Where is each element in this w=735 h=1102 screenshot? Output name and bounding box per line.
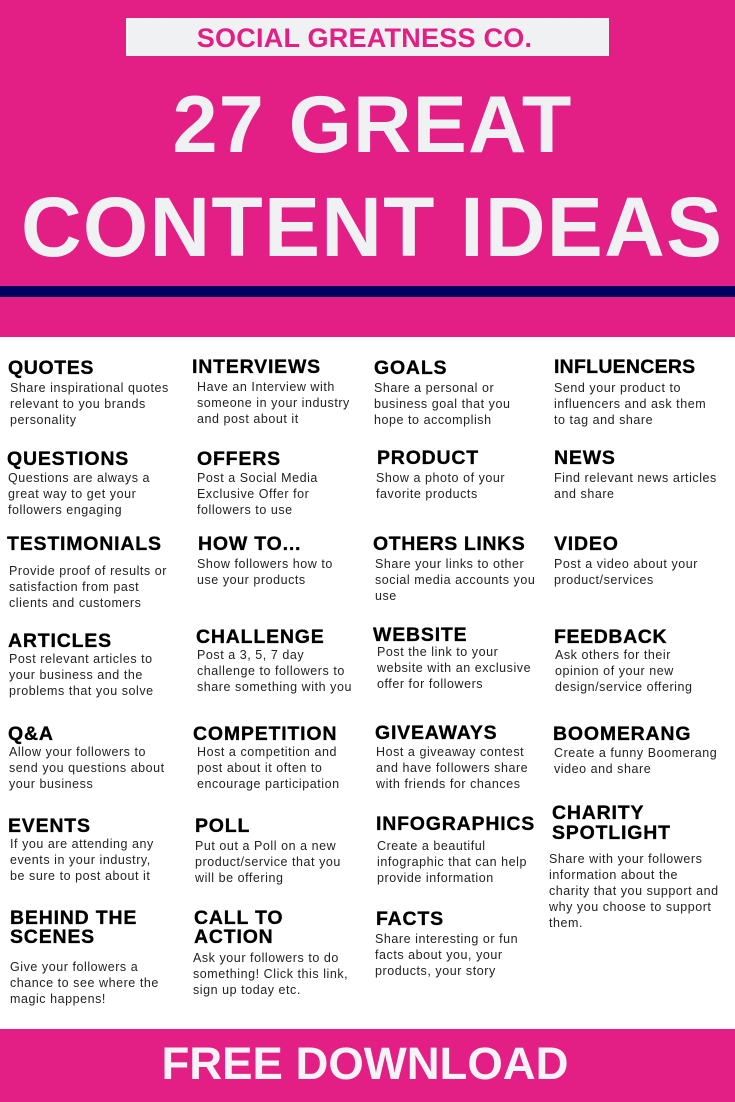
idea: how to: Show followers how to bbox=[197, 557, 333, 571]
idea: goals: GOALS bbox=[374, 357, 447, 379]
idea: poll: will be offering bbox=[195, 871, 283, 885]
idea: facts: FACTS bbox=[376, 908, 444, 930]
idea: challenge: Post a 3, 5, 7 day bbox=[197, 648, 304, 662]
idea: interviews: Have an Interview with bbox=[197, 380, 335, 394]
idea: influencers: influencers and ask them bbox=[554, 397, 706, 411]
idea: competition: post about it often to bbox=[197, 761, 322, 775]
idea: goals: business goal that you bbox=[374, 397, 510, 411]
idea: quotes: Share inspirational quotes bbox=[10, 381, 169, 395]
idea: giveaways: with friends for chances bbox=[376, 777, 521, 791]
idea: offers: OFFERS bbox=[197, 448, 281, 470]
idea: call to action: CALL TO bbox=[194, 907, 283, 929]
idea: questions: followers engaging bbox=[8, 503, 122, 517]
idea: how to bbox=[197, 533, 333, 587]
footer banner: FREE DOWNLOAD bbox=[162, 1038, 568, 1089]
idea: feedback: design/service offering bbox=[555, 680, 692, 694]
idea: behind the scenes: BEHIND THE bbox=[10, 907, 137, 929]
idea: website: Post the link to your bbox=[377, 645, 498, 659]
idea: infographics: provide information bbox=[377, 871, 494, 885]
idea: facts: Share interesting or fun bbox=[375, 932, 518, 946]
idea: quotes: personality bbox=[10, 413, 76, 427]
idea: call to action: sign up today etc. bbox=[193, 983, 301, 997]
idea: charity spotlight: information about the bbox=[549, 868, 678, 882]
idea: feedback: Ask others for their bbox=[555, 648, 671, 662]
idea: quotes bbox=[8, 357, 169, 427]
idea: challenge bbox=[196, 626, 352, 694]
idea: articles: Post relevant articles to bbox=[9, 652, 153, 666]
idea: quotes: relevant to you brands bbox=[10, 397, 146, 411]
idea: offers: Exclusive Offer for bbox=[197, 487, 309, 501]
idea: call to action bbox=[193, 907, 348, 997]
idea: competition: COMPETITION bbox=[193, 723, 337, 745]
idea: articles: your business and the bbox=[9, 668, 143, 682]
header panel bbox=[0, 0, 735, 337]
idea: charity spotlight: charity that you support and bbox=[549, 884, 719, 898]
idea: news: Find relevant news articles bbox=[554, 471, 717, 485]
idea: influencers: INFLUENCERS bbox=[554, 356, 695, 378]
idea: others links: OTHERS LINKS bbox=[373, 533, 525, 555]
idea: video bbox=[554, 533, 698, 587]
idea: interviews: and post about it bbox=[197, 412, 299, 426]
idea: behind the scenes bbox=[10, 907, 159, 1006]
idea: challenge: challenge to followers to bbox=[197, 664, 345, 678]
idea: challenge: share something with you bbox=[197, 680, 352, 694]
idea: infographics: infographic that can help bbox=[377, 855, 527, 869]
idea: interviews: INTERVIEWS bbox=[192, 356, 321, 378]
brand banner bbox=[126, 18, 609, 56]
idea: articles: ARTICLES bbox=[8, 630, 112, 652]
idea: website bbox=[372, 624, 531, 691]
idea: testimonials: TESTIMONIALS bbox=[7, 533, 162, 555]
idea: quotes: QUOTES bbox=[8, 357, 94, 379]
idea: how to: use your products bbox=[197, 573, 306, 587]
idea: others links: use bbox=[375, 589, 397, 603]
idea: infographics: INFOGRAPHICS bbox=[376, 813, 535, 835]
idea: facts: facts about you, your bbox=[375, 948, 503, 962]
idea: website: WEBSITE bbox=[373, 624, 467, 646]
idea: influencers: to tag and share bbox=[554, 413, 653, 427]
idea: q&a bbox=[8, 723, 165, 791]
idea: news bbox=[554, 447, 717, 501]
idea: q&a: Q&A bbox=[8, 723, 54, 745]
idea: testimonials bbox=[7, 533, 167, 610]
idea: charity spotlight bbox=[549, 802, 719, 930]
idea: testimonials: Provide proof of results or bbox=[9, 564, 167, 578]
idea: poll bbox=[195, 815, 341, 885]
idea: behind the scenes: magic happens! bbox=[10, 992, 106, 1006]
idea: website: website with an exclusive bbox=[377, 661, 531, 675]
idea: product: favorite products bbox=[376, 487, 478, 501]
idea: articles: problems that you solve bbox=[9, 684, 154, 698]
idea: giveaways: GIVEAWAYS bbox=[375, 722, 497, 744]
idea: video: VIDEO bbox=[554, 533, 619, 555]
idea: charity spotlight: them. bbox=[549, 916, 583, 930]
idea: call to action: something! Click this link, bbox=[193, 967, 348, 981]
idea: boomerang bbox=[553, 723, 717, 776]
idea: poll: product/service that you bbox=[195, 855, 341, 869]
idea: offers bbox=[197, 448, 318, 517]
idea: questions: Questions are always a bbox=[8, 471, 150, 485]
idea: events: be sure to post about it bbox=[10, 869, 150, 883]
idea: call to action: Ask your followers to do bbox=[193, 951, 339, 965]
title line 2: CONTENT IDEAS bbox=[21, 180, 723, 274]
idea: q&a: Allow your followers to bbox=[9, 745, 146, 759]
idea: others links: Share your links to other bbox=[375, 557, 524, 571]
idea: others links bbox=[373, 533, 535, 603]
idea: poll: POLL bbox=[195, 815, 250, 837]
idea: goals: Share a personal or bbox=[374, 381, 494, 395]
idea: questions: QUESTIONS bbox=[7, 448, 129, 470]
idea: goals: hope to accomplish bbox=[374, 413, 492, 427]
idea: boomerang: video and share bbox=[554, 762, 651, 776]
idea: news: and share bbox=[554, 487, 615, 501]
idea: boomerang: Create a funny Boomerang bbox=[554, 746, 717, 760]
idea: giveaways: Host a giveaway contest bbox=[376, 745, 524, 759]
idea: competition: Host a competition and bbox=[197, 745, 337, 759]
idea: charity spotlight: SPOTLIGHT bbox=[552, 822, 671, 844]
idea: product: PRODUCT bbox=[377, 447, 479, 469]
idea: infographics: Create a beautiful bbox=[377, 839, 486, 853]
idea: product: Show a photo of your bbox=[376, 471, 505, 485]
idea: competition: encourage participation bbox=[197, 777, 340, 791]
idea: events: If you are attending any bbox=[10, 837, 154, 851]
idea: facts bbox=[375, 908, 518, 978]
idea: poll: Put out a Poll on a new bbox=[195, 839, 336, 853]
footer banner bbox=[0, 1029, 735, 1102]
idea: boomerang: BOOMERANG bbox=[553, 723, 691, 745]
idea: behind the scenes: Give your followers a bbox=[10, 960, 138, 974]
idea: charity spotlight: CHARITY bbox=[552, 802, 644, 824]
idea: website: offer for followers bbox=[377, 677, 483, 691]
idea: facts: products, your story bbox=[375, 964, 496, 978]
idea: offers: Post a Social Media bbox=[197, 471, 318, 485]
idea: questions bbox=[7, 448, 150, 517]
idea: giveaways: and have followers share bbox=[376, 761, 528, 775]
idea: events: events in your industry, bbox=[10, 853, 151, 867]
idea: news: NEWS bbox=[554, 447, 616, 469]
brand banner: SOCIAL GREATNESS CO. bbox=[197, 23, 532, 53]
idea: events: EVENTS bbox=[8, 815, 91, 837]
navy stripe bbox=[0, 286, 735, 297]
idea: interviews: someone in your industry bbox=[197, 396, 350, 410]
idea: influencers bbox=[554, 356, 706, 427]
idea: competition bbox=[193, 723, 340, 791]
idea: video: product/services bbox=[554, 573, 654, 587]
idea: feedback: opinion of your new bbox=[555, 664, 674, 678]
idea: charity spotlight: Share with your followers bbox=[549, 852, 702, 866]
idea: call to action: ACTION bbox=[194, 926, 274, 948]
idea: others links: social media accounts you bbox=[375, 573, 535, 587]
idea: feedback bbox=[554, 626, 692, 694]
idea: giveaways bbox=[375, 722, 528, 791]
title line 1: 27 GREAT bbox=[172, 80, 573, 170]
idea: product bbox=[376, 447, 505, 501]
idea: challenge: CHALLENGE bbox=[196, 626, 325, 648]
idea: testimonials: clients and customers bbox=[9, 596, 141, 610]
idea: questions: great way to get your bbox=[8, 487, 136, 501]
idea: behind the scenes: chance to see where the bbox=[10, 976, 159, 990]
idea: q&a: your business bbox=[9, 777, 93, 791]
idea: testimonials: satisfaction from past bbox=[9, 580, 139, 594]
idea: interviews bbox=[192, 356, 350, 426]
idea: offers: followers to use bbox=[197, 503, 293, 517]
idea: articles bbox=[8, 630, 154, 698]
idea: behind the scenes: SCENES bbox=[10, 926, 95, 948]
idea: influencers: Send your product to bbox=[554, 381, 681, 395]
idea: events bbox=[8, 815, 154, 883]
idea: charity spotlight: why you choose to support bbox=[549, 900, 711, 914]
idea: feedback: FEEDBACK bbox=[554, 626, 667, 648]
idea: q&a: send you questions about bbox=[9, 761, 165, 775]
idea: infographics bbox=[376, 813, 535, 885]
idea: video: Post a video about your bbox=[554, 557, 698, 571]
idea: how to: HOW TO... bbox=[198, 533, 301, 555]
idea: goals bbox=[374, 357, 510, 427]
